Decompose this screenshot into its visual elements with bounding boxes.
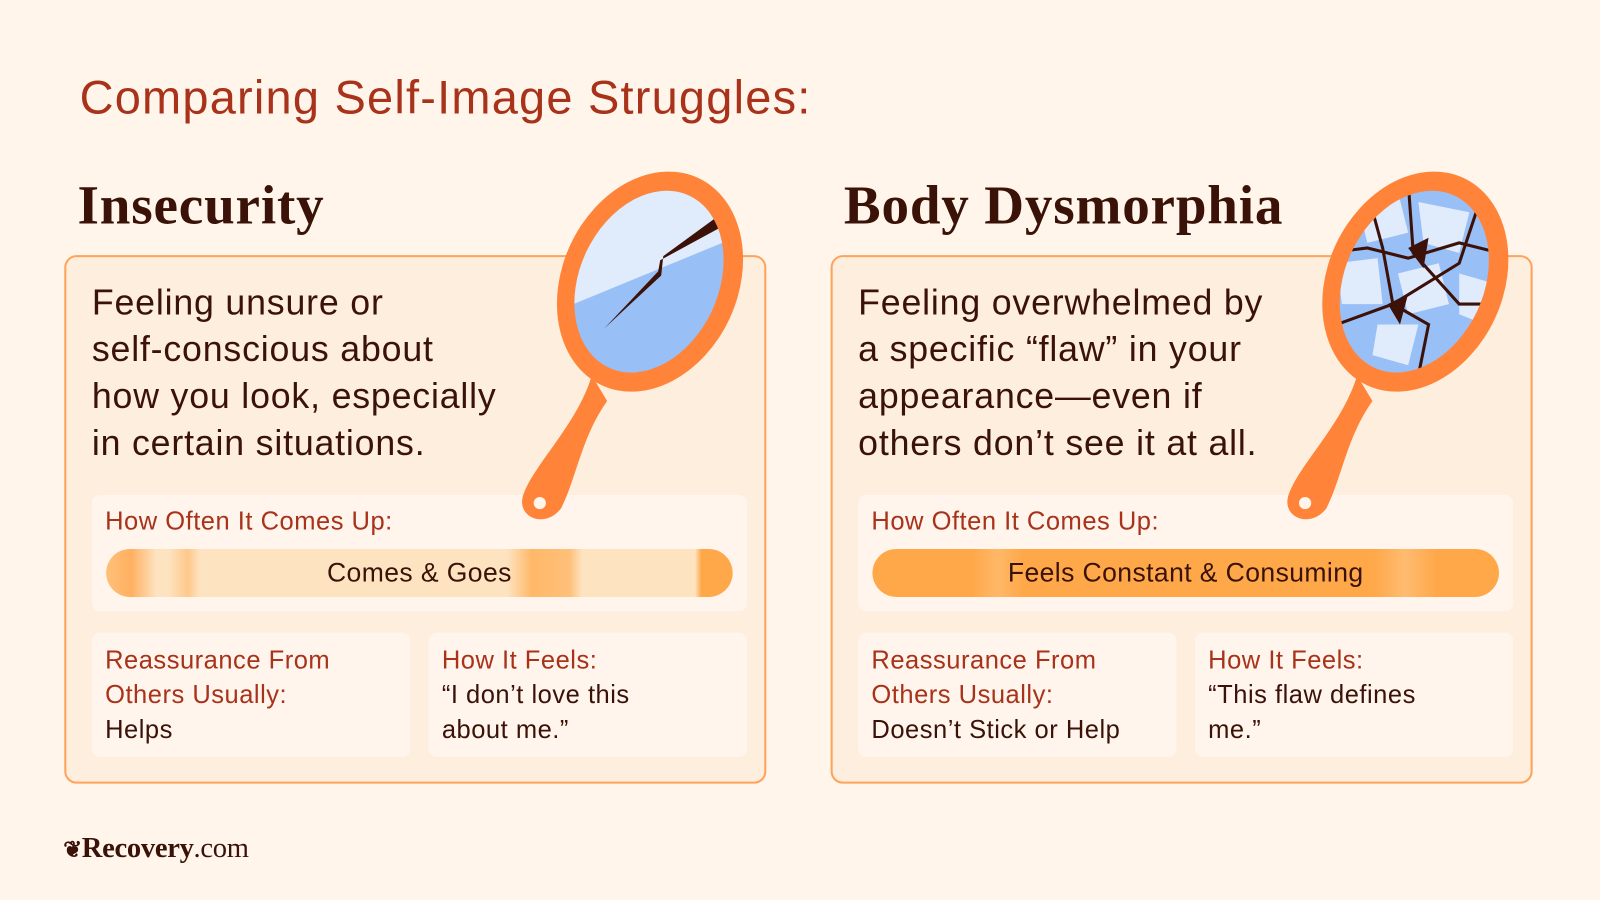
bar: constant: Feels Constant & Consuming <box>1008 557 1364 588</box>
panel: body dysmorphia <box>831 255 1533 784</box>
bar: comes and goes <box>106 549 733 597</box>
panel: insecurity <box>64 255 766 784</box>
card: how it feels <box>429 633 747 757</box>
description: a specific “flaw” in your <box>858 330 1242 369</box>
heading: body dysmorphia: Body Dysmorphia <box>844 174 1283 236</box>
card: how it feels: How It Feels: <box>1208 646 1364 674</box>
card: reassurance: Reassurance From <box>871 646 1097 674</box>
logo: ❦Recovery.com <box>63 833 249 864</box>
label: How Often It Comes Up: <box>871 507 1159 536</box>
card: how it feels: about me.” <box>442 715 569 744</box>
card: reassurance: Reassurance From <box>105 646 330 674</box>
description <box>858 283 1263 463</box>
icon: shattered mirror <box>1287 172 1508 520</box>
card: how it feels: “This flaw defines <box>1208 681 1416 709</box>
card: how it feels: How It Feels: <box>442 646 597 674</box>
card: reassurance: Helps <box>105 715 173 744</box>
label: How Often It Comes Up: <box>105 507 393 536</box>
card: how often <box>858 495 1513 611</box>
description <box>92 283 497 463</box>
description: in certain situations. <box>92 423 425 463</box>
title: Comparing Self-Image Struggles: <box>80 70 812 123</box>
description: others don’t see it at all. <box>858 423 1257 463</box>
card: reassurance: Doesn’t Stick or Help <box>871 715 1120 744</box>
card: how it feels: me.” <box>1208 715 1261 744</box>
bar: comes and goes: Comes & Goes <box>327 557 512 588</box>
bar: constant <box>872 549 1499 597</box>
card: reassurance: Others Usually: <box>871 681 1053 709</box>
description: Feeling overwhelmed by <box>858 283 1263 322</box>
card: how often <box>92 495 747 611</box>
description: appearance—even if <box>858 377 1202 416</box>
card: reassurance <box>92 633 410 757</box>
heading: insecurity: Insecurity <box>78 174 324 236</box>
description: self-conscious about <box>92 330 434 369</box>
icon: cracked mirror <box>522 172 744 520</box>
card: reassurance <box>858 633 1177 757</box>
card: how it feels <box>1195 633 1513 757</box>
description: Feeling unsure or <box>92 283 384 322</box>
card: reassurance: Others Usually: <box>105 681 287 709</box>
card: how it feels: “I don’t love this <box>442 681 630 709</box>
description: how you look, especially <box>92 377 497 416</box>
